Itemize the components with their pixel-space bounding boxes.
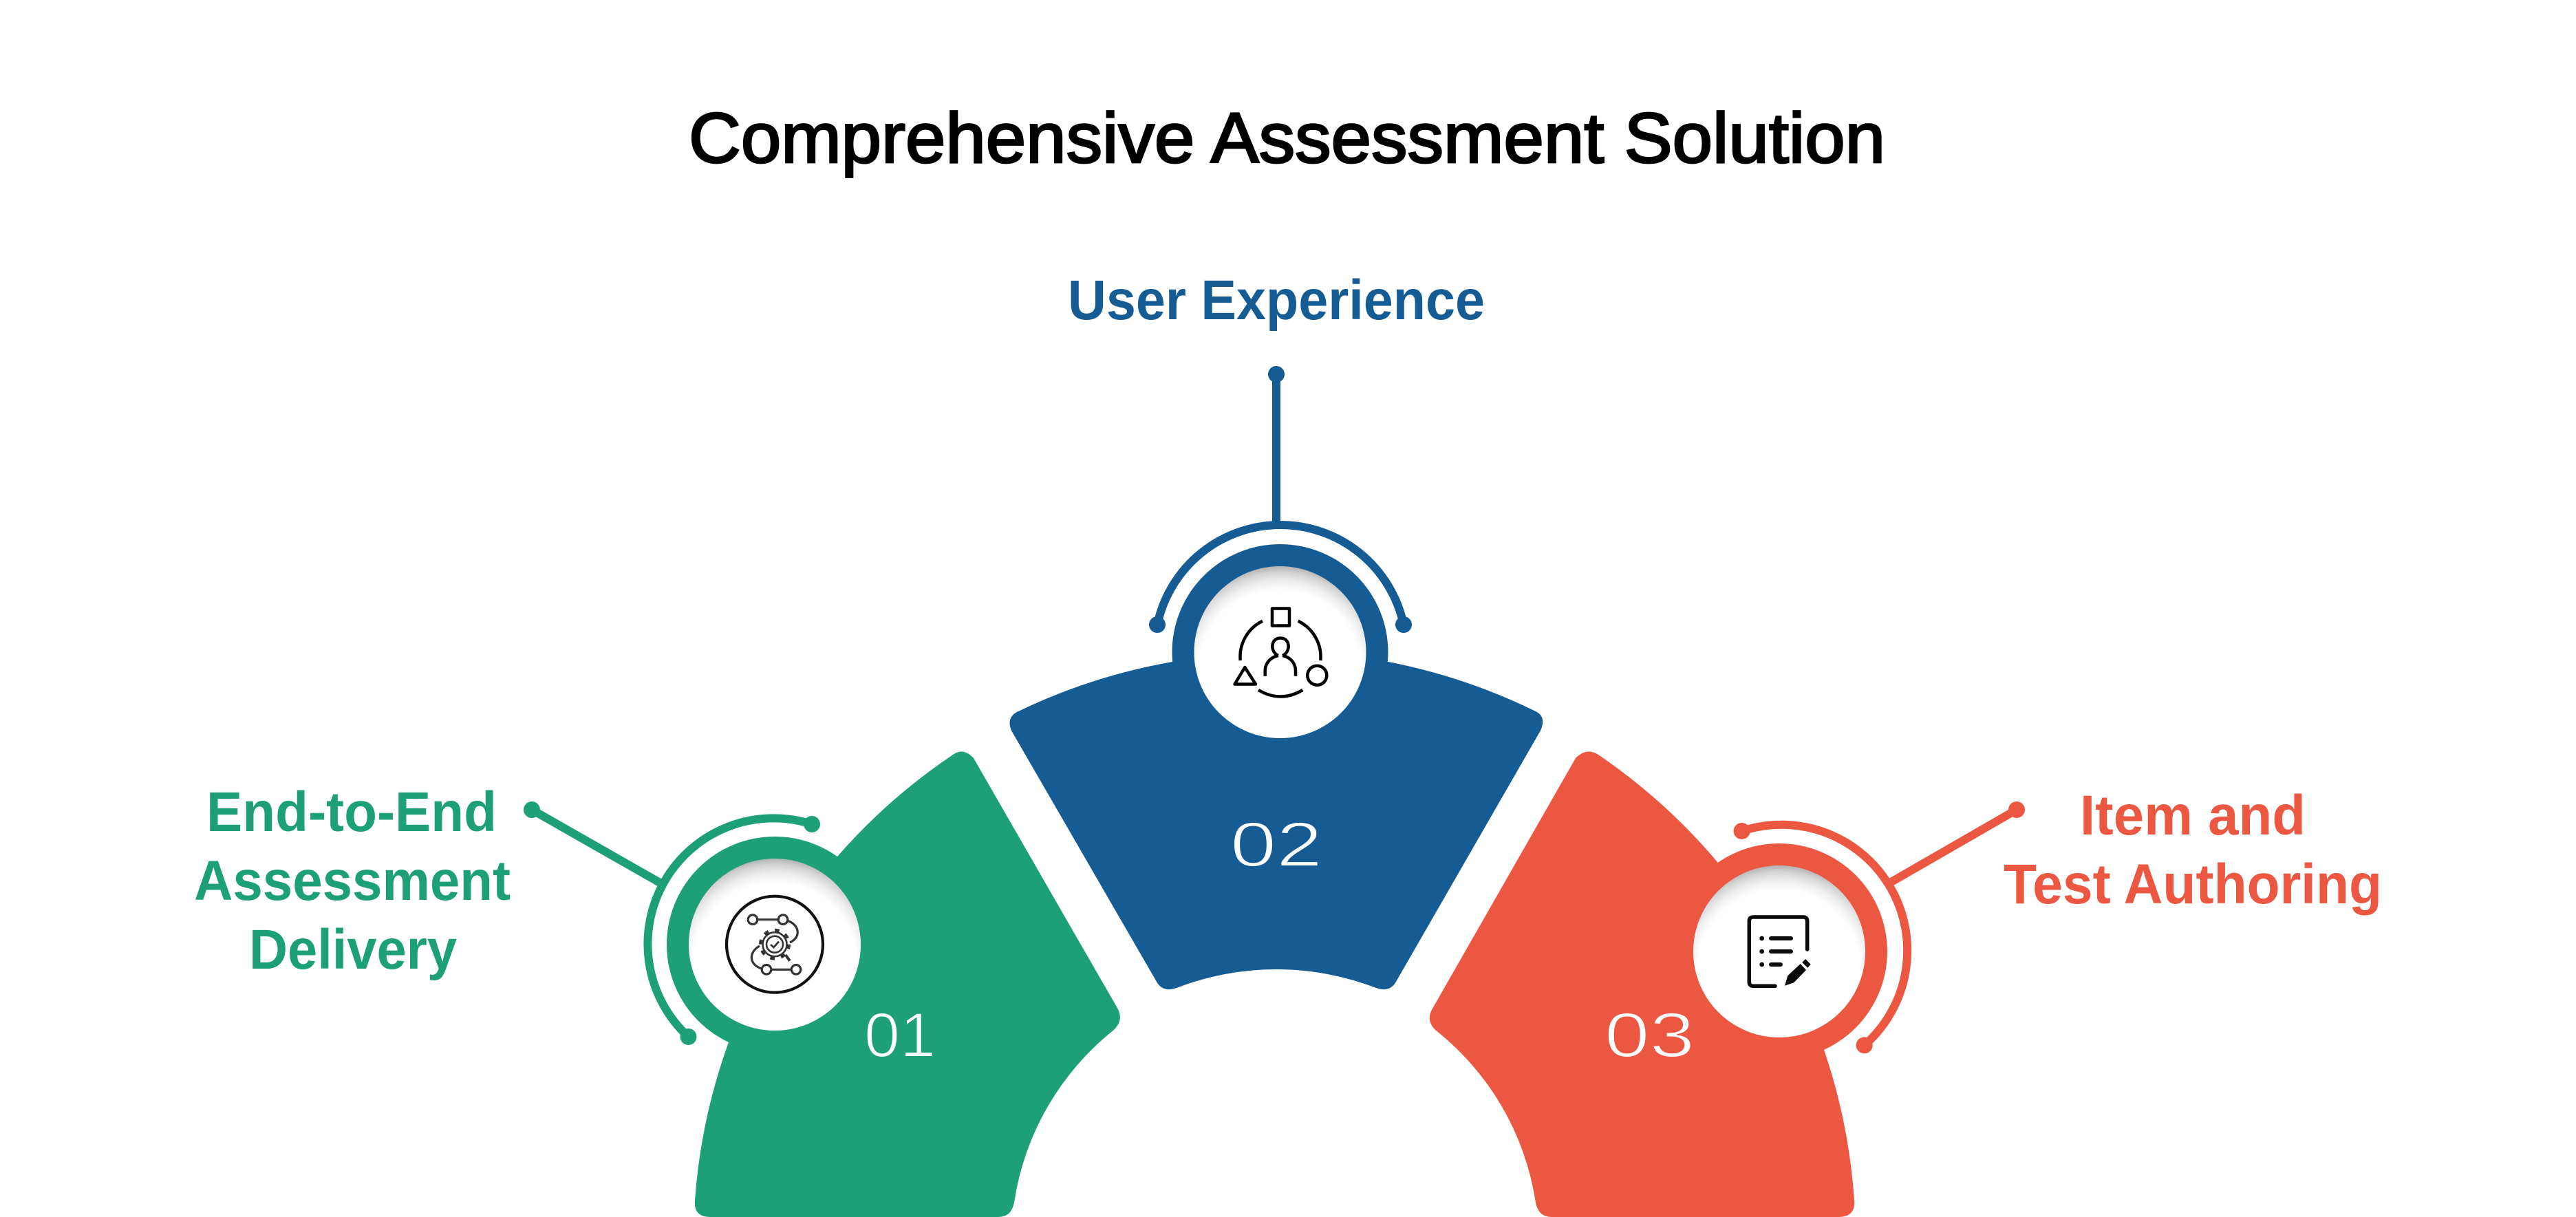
icon: person with shapes — [1234, 608, 1327, 696]
icon: document with pencil — [1749, 917, 1811, 986]
icon: gear with workflow nodes — [727, 896, 823, 993]
label: Assessment — [194, 850, 511, 912]
connector arc: blue — [1149, 366, 1412, 633]
icon disc: red — [1693, 865, 1865, 1037]
icon disc: blue — [1194, 566, 1366, 738]
connector arc: red — [1734, 801, 2025, 1053]
label: User Experience — [1068, 269, 1485, 332]
segment: green sector — [695, 752, 1120, 1217]
title: Comprehensive Assessment Solution — [689, 98, 1885, 177]
panel: 03 Item and Test Authoring — [1430, 752, 2382, 1217]
icon ring: red — [1671, 843, 1887, 1059]
step number: 03 — [1604, 1000, 1695, 1070]
panel: 02 User Experience — [1010, 269, 1543, 989]
label: Item and — [2080, 784, 2306, 847]
label: Delivery — [249, 918, 457, 981]
icon ring: blue — [1172, 544, 1388, 760]
connector arc: green — [524, 801, 820, 1045]
segment: red sector — [1430, 752, 1854, 1217]
segment: blue sector — [1010, 662, 1543, 989]
step number: 01 — [864, 1000, 936, 1070]
step number: 02 — [1230, 810, 1322, 880]
label — [2004, 784, 2382, 916]
label: Test Authoring — [2004, 853, 2382, 916]
label — [194, 781, 511, 981]
panel: 01 End-to-End Assessment Delivery — [194, 752, 1120, 1217]
icon disc: green — [689, 859, 861, 1031]
icon ring: green — [667, 837, 883, 1053]
label: End-to-End — [206, 781, 497, 843]
